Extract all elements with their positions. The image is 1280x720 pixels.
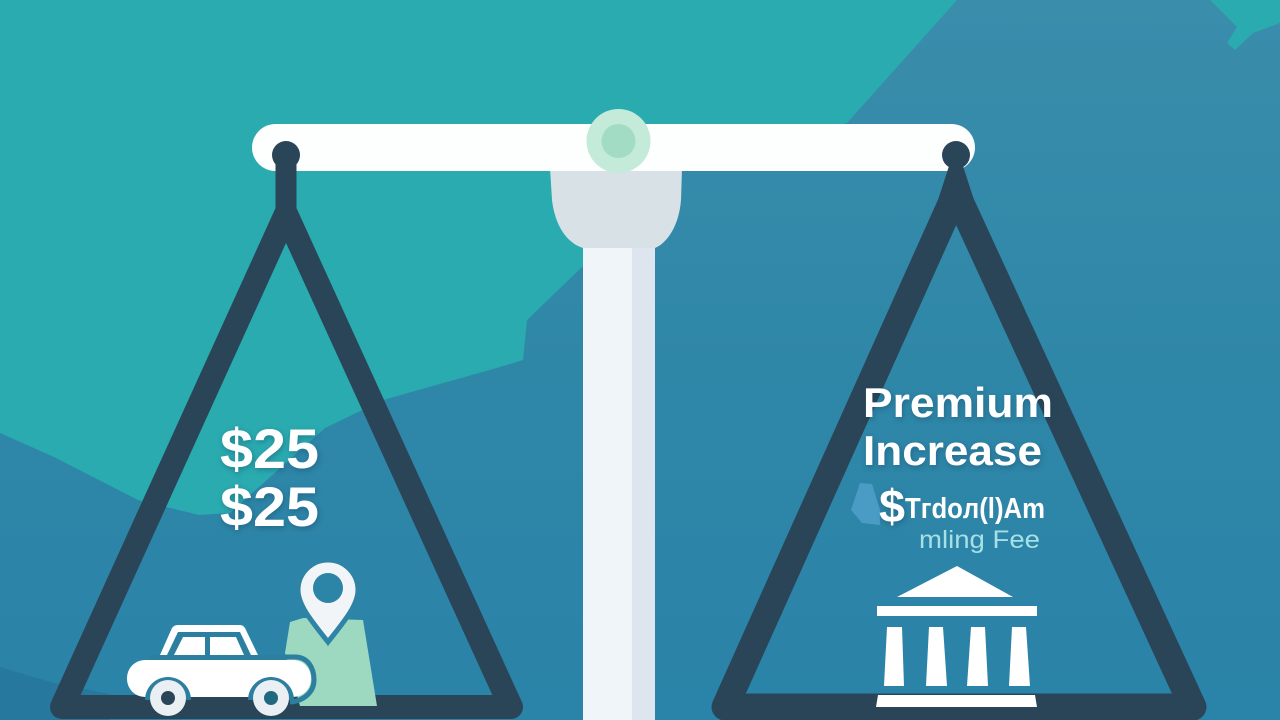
left scale pan frame — [62, 141, 511, 707]
column — [583, 240, 655, 720]
garbled amount text: $ — [879, 480, 905, 532]
background: darker lower-left hill — [0, 667, 110, 720]
right scale pan frame — [725, 141, 1193, 707]
right heading text — [863, 379, 1053, 474]
left amount text — [220, 417, 319, 538]
garbled amount icon blob — [851, 483, 880, 525]
icon: map pin on green marker — [285, 560, 377, 706]
left amount text: $25 — [220, 417, 319, 480]
pivot — [586, 109, 650, 173]
right heading text: Increase — [863, 427, 1042, 474]
right heading text: Premium — [863, 379, 1053, 426]
column cap — [550, 168, 682, 248]
filing fee label: mling Fee — [919, 526, 1040, 554]
icon: bank building — [876, 566, 1037, 707]
garbled amount text: Tгdoл(l)Am — [905, 493, 1045, 525]
garbled amount text — [879, 480, 1045, 532]
icon: car — [127, 625, 314, 716]
left amount text: $25 — [220, 475, 319, 538]
beam — [252, 124, 975, 171]
